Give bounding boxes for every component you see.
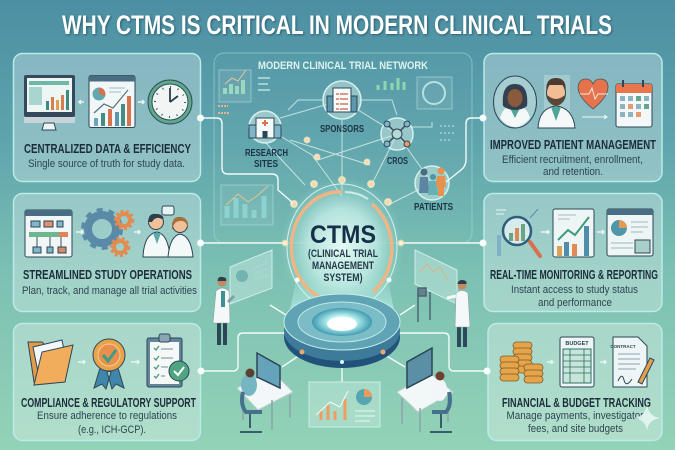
icon: female doctor portrait <box>494 76 536 128</box>
glow <box>280 177 404 317</box>
node: sponsors <box>320 81 364 135</box>
equipment stand <box>418 288 430 322</box>
panel: improved patient management <box>484 54 662 182</box>
description <box>37 410 177 436</box>
icon: report chart window <box>89 76 135 128</box>
network glowing nodes <box>291 138 391 207</box>
description: and performance <box>538 297 612 309</box>
connector lines <box>200 118 488 382</box>
description <box>506 410 644 435</box>
icon: budget sheet: BUDGET <box>565 341 589 347</box>
panel: compliance & regulatory support <box>14 324 200 440</box>
label: patients: PATIENTS <box>414 201 453 213</box>
label: sponsors: SPONSORS <box>320 123 364 135</box>
arrow <box>600 360 606 364</box>
arrow <box>131 360 139 364</box>
central platform <box>284 294 400 368</box>
arrow <box>138 100 144 104</box>
network connection lines <box>265 100 432 205</box>
icon: heart <box>578 79 608 109</box>
icon: calendar <box>616 80 652 127</box>
node: research sites <box>245 111 288 170</box>
panel: centralized data & efficiency <box>14 54 200 182</box>
icon: award badge <box>93 339 125 389</box>
icon: coin stacks <box>500 342 543 383</box>
ctms full name: SYSTEM) <box>324 272 363 284</box>
beam <box>288 270 396 320</box>
description: (e.g., ICH-GCP). <box>78 424 146 436</box>
workstation left <box>237 353 293 432</box>
connection glows <box>282 240 404 246</box>
label: research sites: RESEARCH <box>245 147 288 159</box>
arrow <box>582 115 607 119</box>
floating screen right <box>415 250 457 304</box>
icon: budget sheet <box>560 337 594 387</box>
icon: two doctors <box>143 206 193 257</box>
arrow <box>597 230 604 234</box>
arrow <box>134 230 140 234</box>
node: cros <box>381 118 413 167</box>
description: Plan, track, and manage all trial activities <box>22 285 197 297</box>
icon: male doctor <box>538 75 575 128</box>
description: Single source of truth for study data. <box>28 158 185 170</box>
description: and retention. <box>543 166 603 178</box>
description: fees, and site budgets <box>528 423 623 435</box>
floating screen left <box>230 250 272 304</box>
rings <box>287 184 397 310</box>
description: Instant access to study status <box>511 284 638 296</box>
workstation right <box>397 348 453 432</box>
icon: magnifier chart <box>496 209 540 256</box>
node: patients <box>414 166 453 213</box>
label: research sites: SITES <box>254 158 278 170</box>
network heading: MODERN CLINICAL TRIAL NETWORK <box>258 60 428 72</box>
icon: timeline window <box>25 210 72 257</box>
ctms full name: MANAGEMENT <box>312 260 374 272</box>
label: research sites <box>245 147 288 170</box>
description <box>511 284 638 309</box>
icon: dashboard window <box>607 209 653 256</box>
panel: real-time monitoring & reporting <box>484 194 662 312</box>
arrow <box>76 230 83 234</box>
ctms full name: (CLINICAL TRIAL <box>308 248 378 260</box>
central ctms hologram <box>280 177 404 320</box>
doctor standing right <box>447 280 470 347</box>
heading: STREAMLINED STUDY OPERATIONS <box>23 268 192 282</box>
icon: contract and pen: CONTRACT <box>610 344 636 349</box>
arrow <box>78 360 85 364</box>
bottom chart panel <box>309 382 380 427</box>
description: Efficient recruitment, enrollment, <box>502 154 643 166</box>
icon: trend chart <box>553 209 594 257</box>
doctor standing left <box>213 277 234 345</box>
label: cros: CROS <box>387 155 408 167</box>
arrow <box>547 360 553 364</box>
arrow <box>79 100 84 104</box>
icon: folder <box>28 340 73 385</box>
icon: gears <box>83 210 133 256</box>
icon: checklist clipboard <box>147 334 189 387</box>
panel: streamlined study operations <box>14 194 200 312</box>
panel: financial & budget tracking <box>488 324 662 440</box>
panel: modern clinical trial network <box>214 53 472 243</box>
heading: COMPLIANCE & REGULATORY SUPPORT <box>21 396 196 410</box>
ctms full name <box>308 248 378 284</box>
arrow <box>541 230 549 234</box>
description <box>502 154 643 178</box>
ctms label: CTMS <box>310 221 376 249</box>
icon: clock <box>148 80 192 124</box>
network small charts <box>218 70 456 225</box>
description: Manage payments, investigator <box>506 410 644 422</box>
description: Ensure adherence to regulations <box>37 410 177 422</box>
heading: CENTRALIZED DATA & EFFICIENCY <box>24 142 192 156</box>
icon: contract and pen <box>610 337 654 387</box>
panel dots <box>197 114 490 374</box>
icon: desktop monitor chart <box>24 75 75 130</box>
icon: sparkle watermark <box>634 404 660 431</box>
